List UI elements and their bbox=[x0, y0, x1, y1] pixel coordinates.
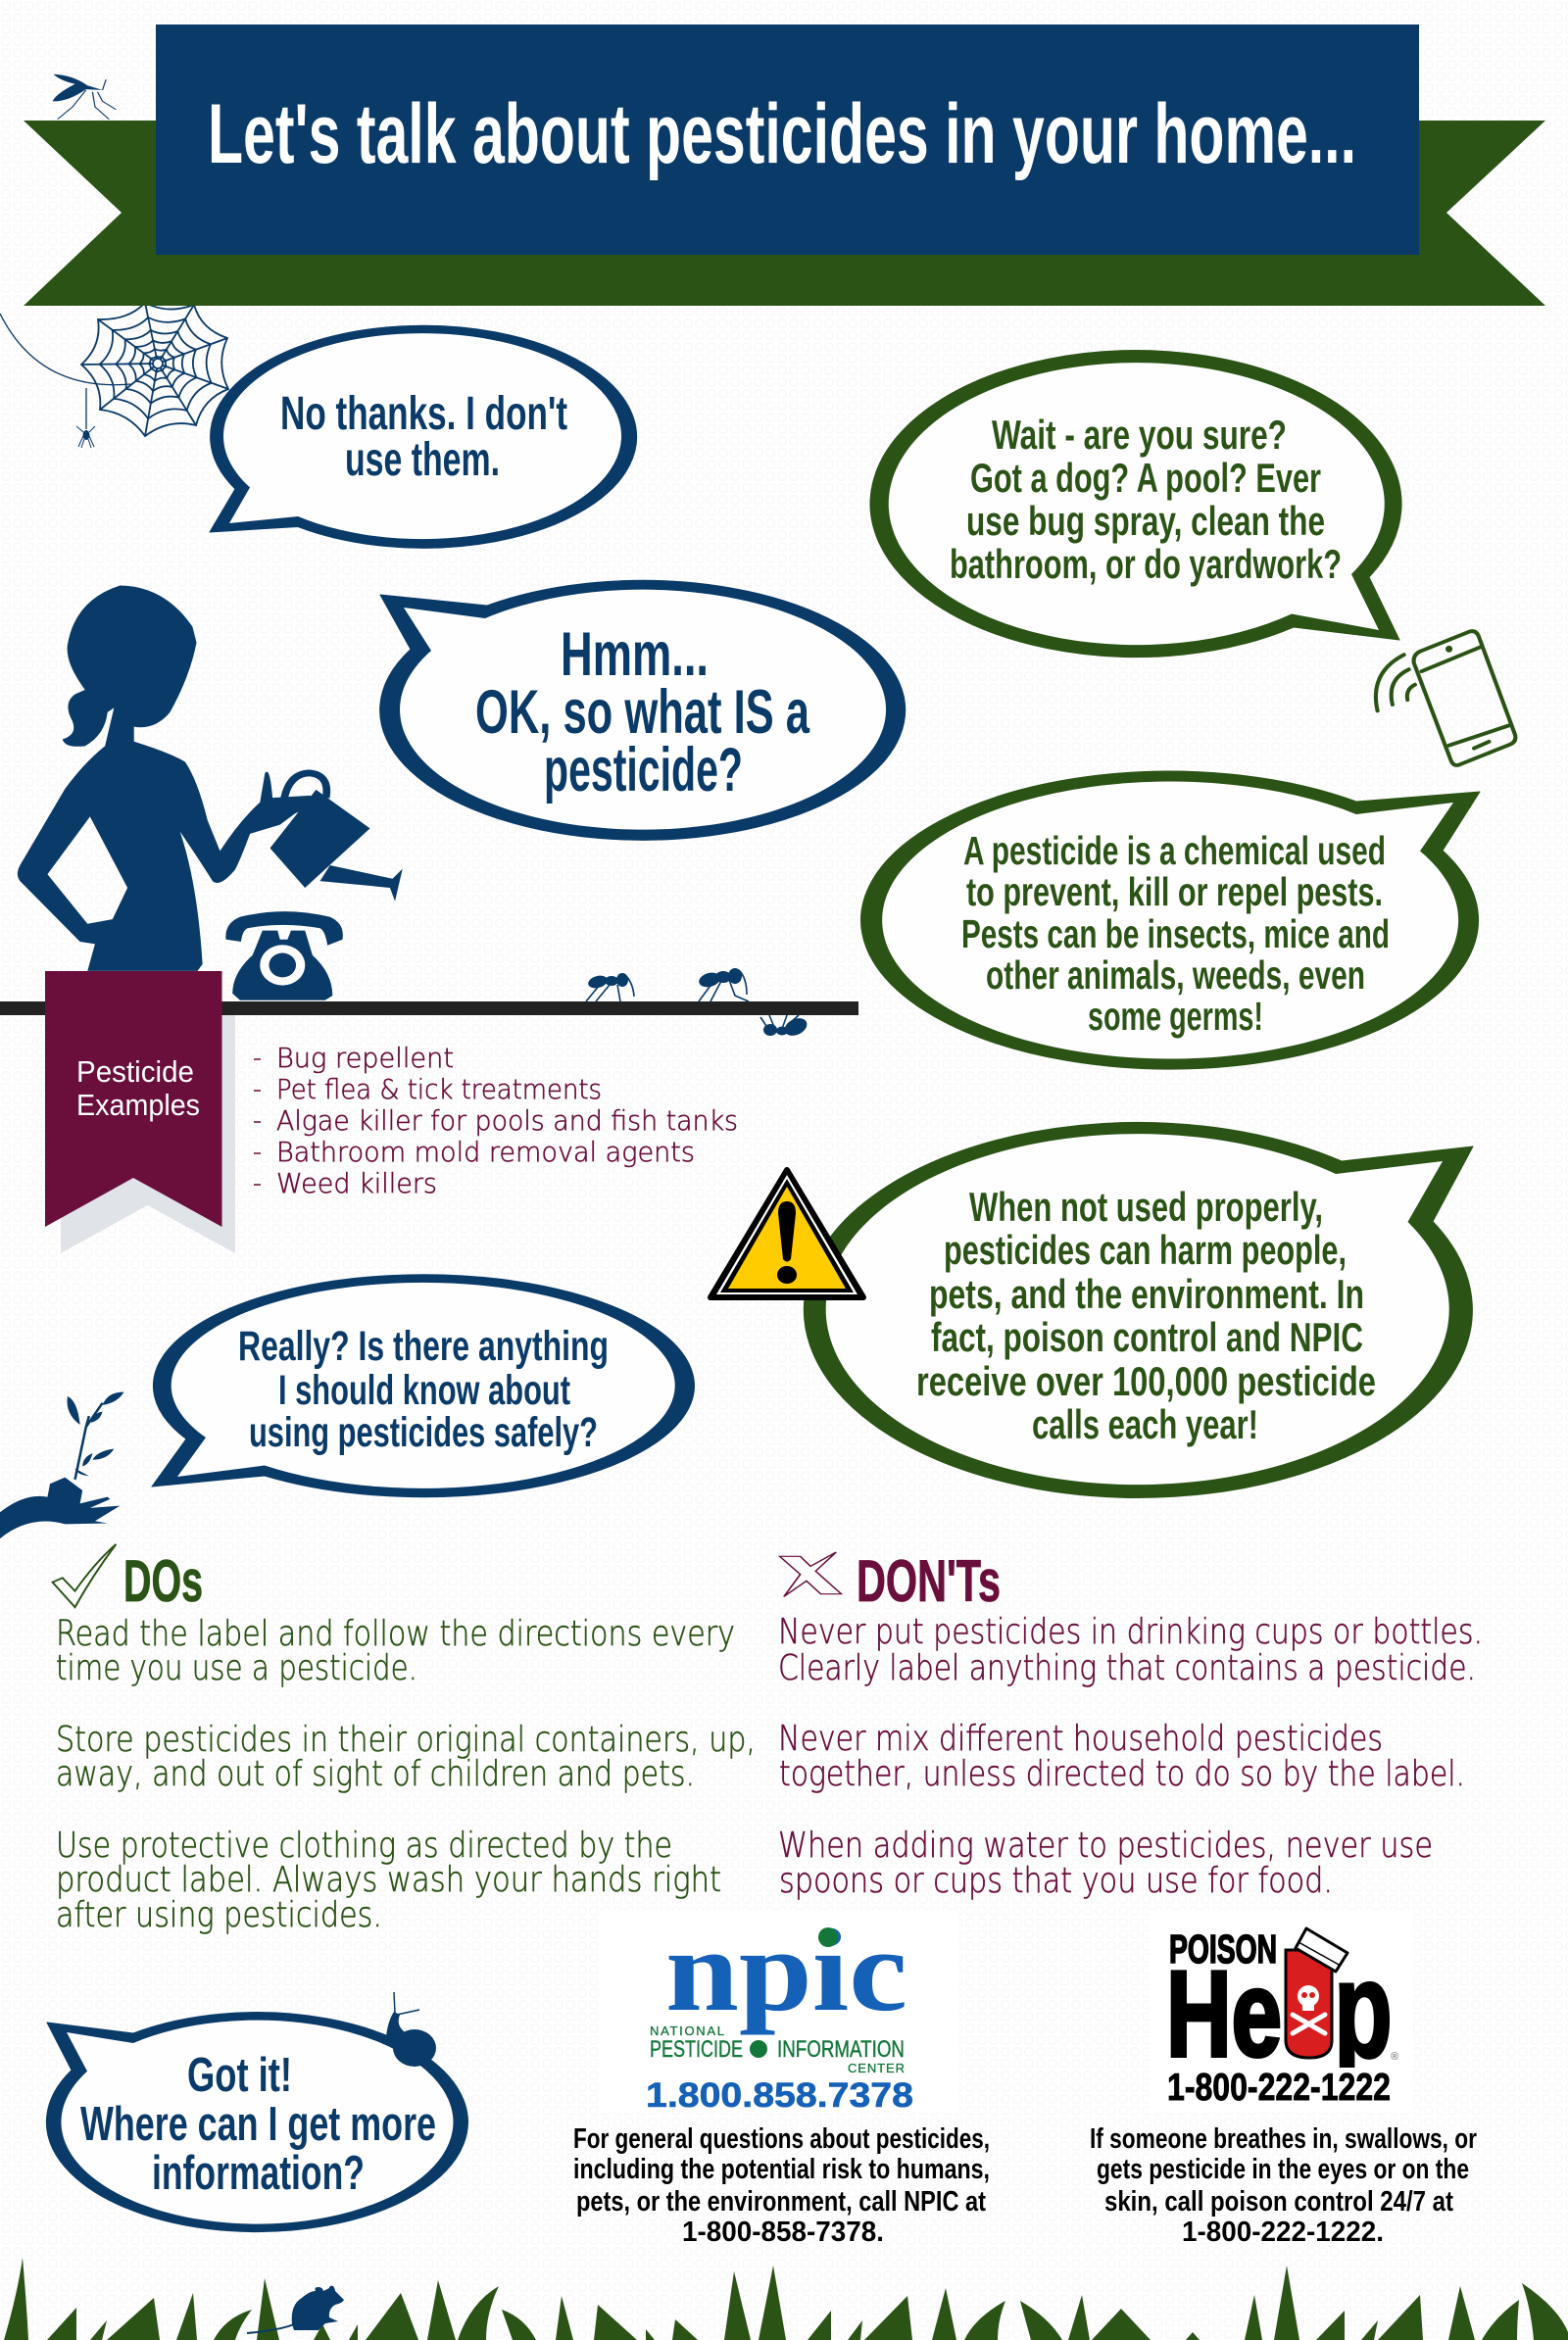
text: npic information: including the potential risk to humans, bbox=[573, 2154, 990, 2185]
text: do tips bbox=[56, 1614, 756, 1935]
grass bbox=[4, 2258, 1568, 2340]
icon: mouse bbox=[247, 2286, 344, 2333]
logo: poison help: ® bbox=[1391, 2051, 1398, 2063]
text: dont tips: Never mix different household pesticides bbox=[778, 1719, 1383, 1759]
logo: npic: npic bbox=[665, 1905, 907, 2035]
list: pesticide examples: Weed killers bbox=[276, 1167, 437, 1199]
speech bubble: wait are you sure bbox=[870, 351, 1401, 658]
text: dont tips: spoons or cups that you use for food. bbox=[779, 1861, 1333, 1901]
text: do tips: Use protective clothing as directed by the bbox=[56, 1826, 672, 1866]
blue title panel bbox=[156, 24, 1419, 255]
text: do tips: after using pesticides. bbox=[56, 1895, 382, 1935]
logo: npic: 1.800.858.7378 bbox=[646, 2076, 913, 2115]
text: do tips: away, and out of sight of children and pets. bbox=[56, 1754, 695, 1794]
icon: mosquito bbox=[53, 74, 116, 120]
column: donts bbox=[778, 1548, 1483, 1901]
logo: poison help bbox=[1166, 1926, 1398, 2109]
text: npic information: 1-800-858-7378. bbox=[682, 2217, 884, 2248]
text: npic information: pets, or the environment, call NPIC at bbox=[576, 2186, 986, 2218]
icon: ant two bbox=[698, 968, 749, 1001]
icon: spider web with hanging spider bbox=[0, 303, 228, 448]
ribbon: pesticide examples bbox=[45, 971, 235, 1253]
icon: poison bottle bbox=[1286, 1928, 1348, 2058]
list: pesticide examples: Bathroom mold removal agents bbox=[276, 1136, 695, 1168]
icon: x mark bbox=[780, 1552, 841, 1596]
speech bubble: poison control warning: receive over 100,000 pesticide bbox=[916, 1358, 1376, 1404]
speech bubble: where can i get more information: information? bbox=[152, 2147, 365, 2200]
speech bubble: poison control warning: calls each year! bbox=[1032, 1401, 1258, 1447]
shelf line bbox=[0, 1001, 858, 1015]
speech bubble: no thanks: No thanks. I don't bbox=[280, 388, 567, 440]
speech bubble: what is a pesticide: pesticide? bbox=[544, 736, 743, 804]
speech bubble: what is a pesticide: OK, so what IS a bbox=[475, 678, 810, 747]
speech bubble: wait are you sure: bathroom, or do yardwork? bbox=[950, 541, 1342, 587]
icon: ant one bbox=[586, 973, 634, 1001]
speech bubble: poison control warning: fact, poison control and NPIC bbox=[931, 1314, 1363, 1360]
heading: dos: DOs bbox=[123, 1548, 203, 1614]
speech bubble: definition of pesticide: other animals, weeds, even bbox=[986, 952, 1365, 998]
logo: poison help: 1-800-222-1222 bbox=[1167, 2067, 1391, 2109]
woman silhouette bbox=[18, 585, 320, 971]
logo: npic: PESTICIDE bbox=[650, 2036, 743, 2063]
speech bubble: using pesticides safely: using pesticides safely? bbox=[249, 1409, 598, 1456]
speech bubble: wait are you sure: use bug spray, clean the bbox=[966, 498, 1325, 544]
text: do tips: time you use a pesticide. bbox=[56, 1648, 417, 1688]
speech bubble: wait are you sure: Wait - are you sure? bbox=[992, 412, 1287, 458]
column: dos bbox=[53, 1544, 756, 1935]
speech bubble: where can i get more information bbox=[46, 2013, 467, 2232]
icon: ant under shelf bbox=[760, 1015, 809, 1039]
text: poison control information: 1-800-222-1222. bbox=[1182, 2217, 1384, 2248]
list: pesticide examples: Pet flea & tick treatments bbox=[276, 1073, 602, 1105]
speech bubble: using pesticides safely: Really? Is there anything bbox=[238, 1323, 609, 1370]
logo: npic: NATIONAL bbox=[650, 2023, 724, 2038]
speech bubble: definition of pesticide: Pests can be insects, mice and bbox=[961, 911, 1390, 956]
speech bubble: where can i get more information: Where can I get more bbox=[80, 2098, 436, 2151]
text: npic information bbox=[573, 2123, 990, 2248]
speech bubble: no thanks: use them. bbox=[345, 434, 500, 486]
icon: snail bbox=[386, 1992, 436, 2067]
speech bubble: definition of pesticide: A pesticide is a chemical used bbox=[963, 828, 1386, 873]
logo: npic: CENTER bbox=[848, 2061, 905, 2075]
text: do tips: product label. Always wash your hands right bbox=[56, 1860, 721, 1900]
icon: hand holding plant bbox=[0, 1392, 124, 1538]
speech bubble: poison control warning: When not used properly, bbox=[969, 1184, 1323, 1230]
speech bubble: no thanks bbox=[210, 325, 637, 548]
text: poison control information bbox=[1090, 2123, 1477, 2248]
text: dont tips: When adding water to pesticides, never use bbox=[778, 1826, 1433, 1866]
icon: check mark bbox=[53, 1544, 116, 1607]
text: poison control information: skin, call poison control 24/7 at bbox=[1104, 2186, 1453, 2218]
speech bubble: using pesticides safely bbox=[152, 1275, 694, 1497]
speech bubble: where can i get more information: Got it! bbox=[187, 2049, 292, 2102]
speech bubble: poison control warning: pets, and the environment. In bbox=[929, 1271, 1364, 1317]
list: pesticide examples: Algae killer for pools and fish tanks bbox=[276, 1104, 738, 1137]
text: poison control information: gets pesticide in the eyes or on the bbox=[1097, 2154, 1469, 2185]
ribbon: pesticide examples: Examples bbox=[76, 1088, 200, 1122]
text: dont tips bbox=[778, 1612, 1483, 1901]
speech bubble: using pesticides safely: I should know about bbox=[278, 1367, 570, 1414]
list: pesticide examples bbox=[254, 1042, 738, 1199]
icon: rotary telephone bbox=[225, 911, 343, 1000]
icon: warning triangle bbox=[710, 1170, 863, 1297]
speech bubble: definition of pesticide: to prevent, kill or repel pests. bbox=[966, 869, 1383, 914]
text: npic information: For general questions about pesticides, bbox=[573, 2123, 990, 2155]
speech bubble: wait are you sure: Got a dog? A pool? Ever bbox=[970, 455, 1321, 501]
text: do tips: Read the label and follow the directions every bbox=[56, 1614, 735, 1654]
speech bubble: poison control warning: pesticides can harm people, bbox=[944, 1227, 1347, 1273]
ribbon: pesticide examples: Pesticide bbox=[76, 1054, 194, 1089]
green ribbon bbox=[24, 121, 1545, 306]
speech bubble: what is a pesticide: Hmm... bbox=[561, 620, 709, 689]
icon: smartphone with signal bbox=[1376, 631, 1515, 765]
speech bubble: what is a pesticide bbox=[380, 580, 906, 840]
logo: npic bbox=[646, 1905, 913, 2115]
speech bubble: definition of pesticide bbox=[861, 771, 1480, 1069]
speech bubble: definition of pesticide: some germs! bbox=[1088, 994, 1263, 1039]
logo: poison help: POISON bbox=[1169, 1926, 1277, 1972]
heading: donts: DON'Ts bbox=[857, 1548, 1001, 1614]
logo: npic: INFORMATION bbox=[777, 2036, 905, 2063]
logo: poison help: He bbox=[1166, 1947, 1282, 2082]
logo: poison help: p bbox=[1334, 1932, 1393, 2086]
text: do tips: Store pesticides in their original containers, up, bbox=[56, 1720, 756, 1760]
icon: watering can bbox=[270, 773, 403, 902]
title banner bbox=[24, 24, 1545, 306]
speech bubble: poison control warning bbox=[804, 1122, 1473, 1497]
list: pesticide examples: Bug repellent bbox=[276, 1042, 454, 1074]
